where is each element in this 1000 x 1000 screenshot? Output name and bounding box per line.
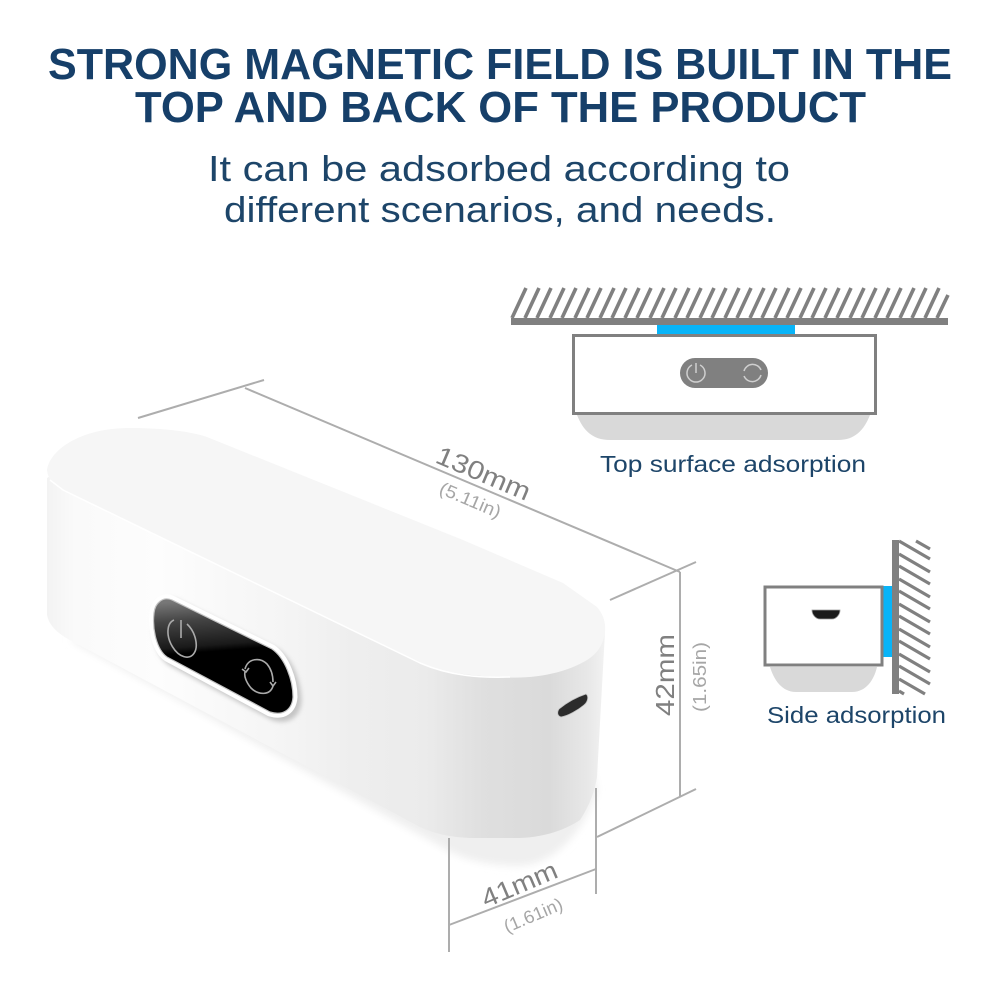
dimension label: length: 130mm [432,440,535,507]
white rim [154,599,293,713]
title: STRONG MAGNETIC FIELD IS BUILT IN THE [48,40,952,89]
ceiling with hatching [511,288,948,325]
button panel [680,358,768,388]
dimension label: width [477,855,566,937]
device body [765,587,882,665]
usb port [812,610,840,619]
icon: power [168,620,196,657]
product photo [47,428,605,866]
title [48,40,952,132]
magnet strip [657,325,795,334]
black key surface [154,599,293,713]
label: Side adsorption [767,702,946,728]
subtitle: different scenarios, and needs. [224,189,776,230]
usb port [558,694,588,717]
magnet strip [883,586,892,657]
subtitle [208,148,790,230]
top edge highlight [50,480,510,677]
device base shadow [577,415,870,440]
title: TOP AND BACK OF THE PRODUCT [135,83,866,132]
diagram: top surface adsorption [511,288,948,477]
subtitle: It can be adsorbed according to [208,148,790,189]
icon: sync [242,660,276,693]
dimension lines [138,380,696,952]
label: Top surface adsorption [600,451,866,477]
diagram: side adsorption [765,540,946,728]
top face [47,428,605,678]
dimension label: height: 42mm [650,634,680,716]
dimension label: length: (5.11in) [436,478,504,522]
button panel [154,599,297,717]
dimension label: width: 41mm [477,855,562,914]
soft base [70,630,597,866]
device base shadow [770,667,877,692]
front wall [47,470,605,838]
wall with hatching [892,540,930,694]
dimension label: height [650,634,710,716]
dimension label: width: (1.61in) [501,894,566,937]
dimension label: length [432,440,535,522]
dimension label: height: (1.65in) [690,642,710,712]
rim shadow [158,603,297,717]
device body [574,336,876,414]
